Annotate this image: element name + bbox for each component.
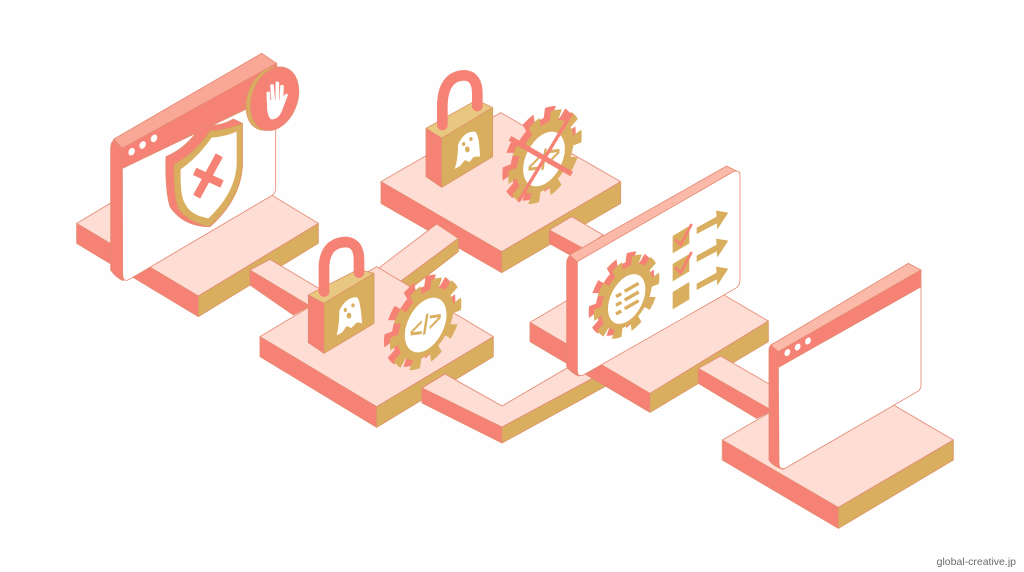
platform: right — [722, 373, 953, 528]
platform: panel base — [530, 252, 768, 412]
connector: middle platform to panel platform — [422, 368, 606, 443]
gear: code — [389, 267, 456, 377]
icon: shield with cross — [166, 119, 242, 227]
icon: ghost — [337, 297, 362, 335]
browser window: empty — [769, 263, 921, 469]
connector: left to middle platform — [250, 259, 330, 315]
gear: checklist — [593, 245, 655, 345]
icon: ghost — [455, 132, 480, 169]
window dots — [127, 133, 159, 157]
lock: middle platform — [308, 242, 374, 353]
icon: stop hand badge — [238, 60, 307, 137]
connector: panel platform to last platform — [698, 356, 777, 418]
platform: top centre — [381, 113, 621, 273]
connector: top platform to panel — [549, 217, 603, 255]
panel: checklist — [567, 166, 740, 376]
gear: code: </> — [410, 302, 442, 349]
platform: middle — [260, 267, 493, 427]
browser window: blocked — [111, 53, 307, 281]
platform: left — [77, 151, 318, 317]
gear: crossed out code: </> — [528, 135, 560, 184]
gear: crossed out code — [507, 99, 577, 211]
checklist rows — [673, 211, 728, 309]
isometric illustration — [77, 53, 953, 528]
lock: top platform — [426, 75, 493, 187]
watermark: global-creative.jp — [937, 556, 1016, 568]
connector: middle to top platform — [378, 224, 458, 292]
window dots — [783, 337, 812, 357]
